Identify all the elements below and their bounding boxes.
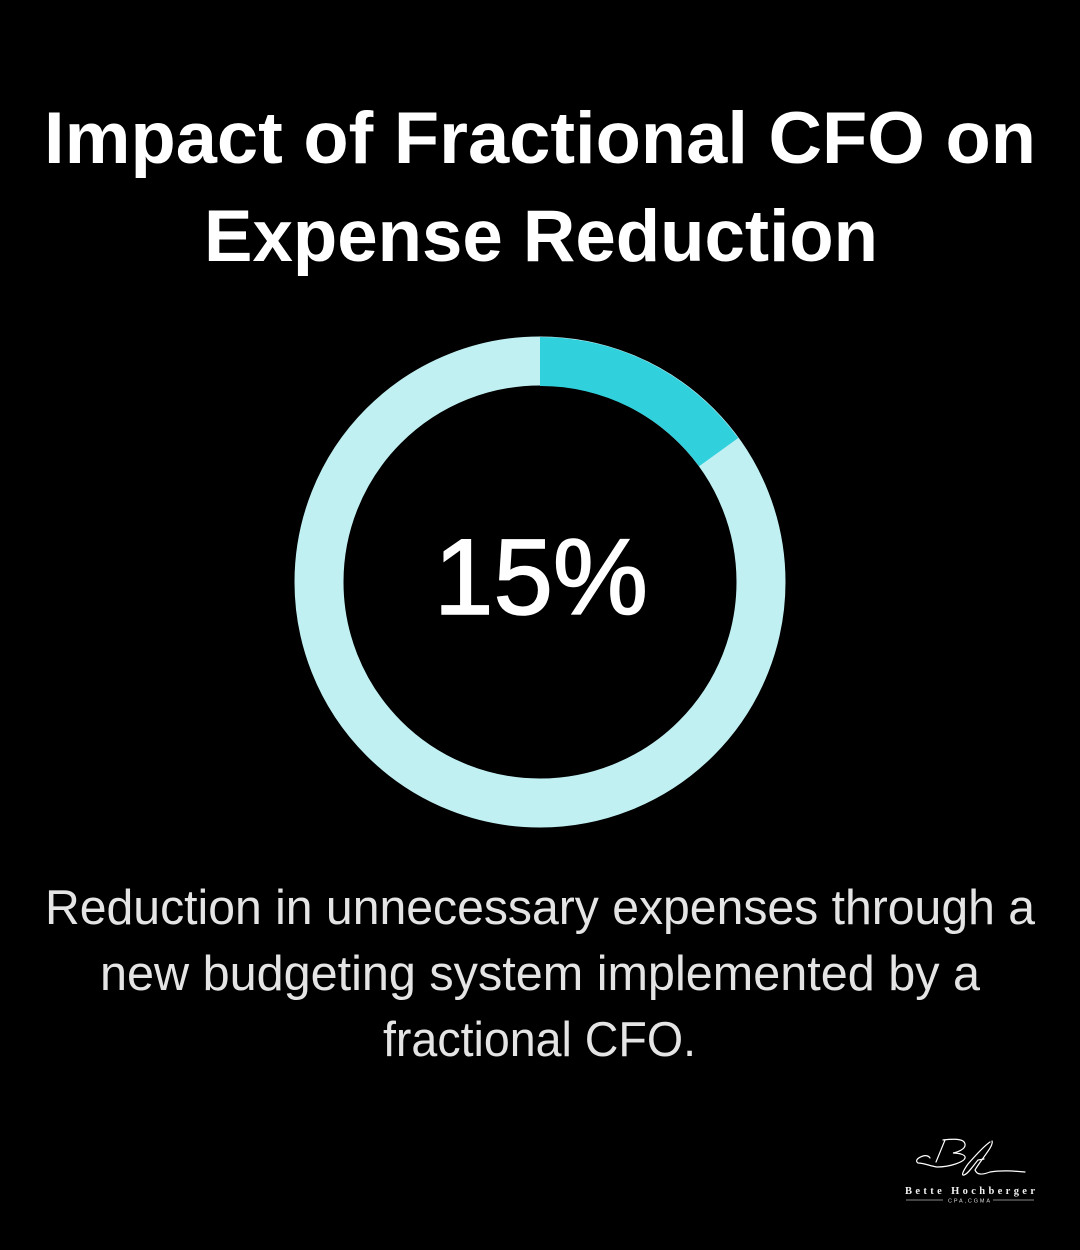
donut chart: 15% [319, 337, 761, 803]
description text: Reduction in unnecessary expenses through a [45, 881, 1036, 935]
description text [45, 881, 1036, 1067]
percentage value: 15% [434, 516, 648, 637]
logo name: Bette Hochberger [905, 1186, 1035, 1197]
donut highlighted segment [540, 337, 738, 466]
donut track [319, 361, 761, 803]
logo signature icon [917, 1139, 1025, 1175]
title [44, 98, 1036, 277]
logo: Bette Hochberger [905, 1139, 1035, 1204]
description text: new budgeting system implemented by a [100, 947, 981, 1001]
logo credentials and rules: CPA,CGMA [948, 1198, 990, 1204]
description text: fractional CFO. [383, 1013, 696, 1067]
title: Impact of Fractional CFO on [44, 98, 1036, 179]
title: Expense Reduction [204, 196, 878, 277]
